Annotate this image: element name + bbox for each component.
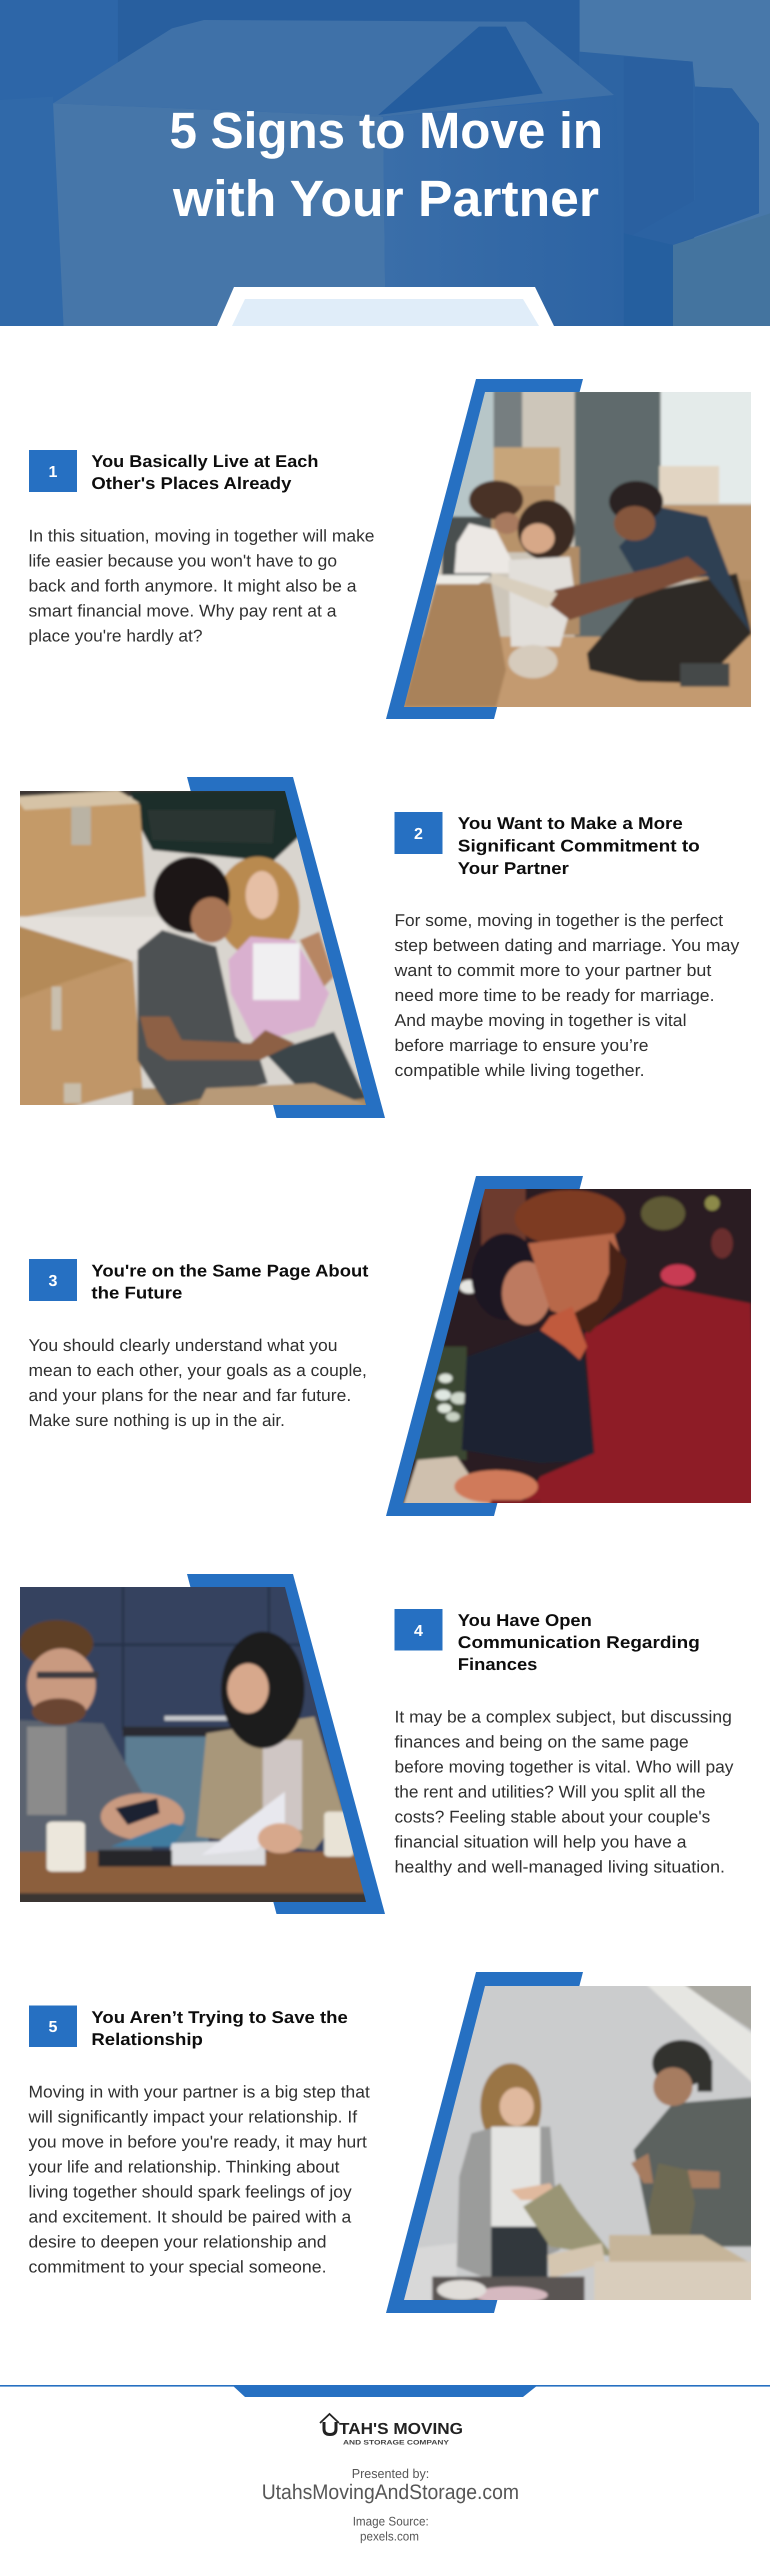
number badge 5: 5 — [49, 2019, 58, 2036]
body text 1: back and forth anymore. It might also be a — [28, 576, 357, 596]
photo 4: couple discussing finances — [10, 1574, 393, 1914]
heading 5: Relationship — [91, 2030, 203, 2049]
man — [138, 930, 268, 1107]
heading 2: Your Partner — [458, 859, 569, 878]
child — [469, 481, 523, 519]
body text 5 — [27, 2082, 370, 2276]
body text 1: In this situation, moving in together will make — [28, 526, 374, 546]
heading 3: the Future — [91, 1284, 182, 1302]
body text 5: desire to deepen your relationship and — [28, 2232, 326, 2251]
man — [587, 573, 752, 683]
website: UtahsMovingAndStorage.com — [262, 2481, 519, 2504]
footer divider with tab — [0, 2385, 770, 2397]
photo 1: family with boxes — [383, 379, 761, 719]
body text 4: costs? Feeling stable about your couple's — [394, 1808, 710, 1827]
foreground box — [404, 580, 506, 707]
number badge 3 — [29, 1259, 77, 1301]
laptop and hands — [403, 1457, 491, 1507]
body text 3: mean to each other, your goals as a couple, — [28, 1361, 367, 1380]
heading 1: You Basically Live at Each — [91, 452, 318, 471]
body text 1: smart financial move. Why pay rent at a — [28, 602, 337, 620]
body text 5: your life and relationship. Thinking about — [28, 2157, 340, 2176]
presented by: Presented by: — [352, 2466, 429, 2481]
man — [521, 1287, 759, 1507]
hero banner — [0, 0, 770, 333]
image source: Image Source: — [353, 2515, 429, 2529]
heading 5: You Aren’t Trying to Save the — [91, 2008, 348, 2027]
heading 2: You Want to Make a More — [458, 814, 683, 833]
body text 1 — [28, 526, 374, 646]
man — [15, 1720, 152, 1853]
heading 4: Communication Regarding — [458, 1633, 700, 1652]
body text 3: and your plans for the near and far future. — [28, 1386, 351, 1405]
man — [634, 2097, 756, 2247]
woman — [518, 500, 575, 560]
body text 5: commitment to your special someone. — [28, 2257, 326, 2276]
footer — [0, 2385, 770, 2543]
photo 2: couple on floor with boxes — [10, 777, 393, 1118]
body text 4: finances and being on the same page — [394, 1733, 689, 1752]
section 3 — [28, 1176, 761, 1516]
body text 5: Moving in with your partner is a big step that — [28, 2082, 370, 2101]
title — [170, 102, 603, 227]
section 4 — [10, 1574, 734, 1914]
body text 1: life easier because you won't have to go — [28, 552, 337, 570]
body text 4: the rent and utilities? Will you split all the — [394, 1783, 706, 1802]
body text 2: before marriage to ensure you’re — [394, 1036, 648, 1055]
number badge 1: 1 — [49, 464, 58, 481]
heading 3: You're on the Same Page About — [91, 1262, 369, 1280]
body text 2: want to commit more to your partner but — [393, 961, 712, 980]
body text 4 — [394, 1708, 734, 1877]
number badge 2 — [394, 812, 442, 854]
woman — [216, 857, 300, 957]
logo: Utah's Moving and Storage Company — [320, 2414, 463, 2447]
section 2 — [10, 777, 740, 1118]
section 5 — [27, 1972, 761, 2313]
body text 5: and excitement. It should be paired with a — [28, 2207, 352, 2226]
number badge 5 — [29, 2006, 77, 2047]
title: with Your Partner — [172, 170, 599, 227]
title: 5 Signs to Move in — [170, 102, 603, 159]
body text 4: healthy and well-managed living situation. — [394, 1858, 725, 1877]
number badge 2: 2 — [414, 826, 423, 843]
heading 2: Significant Commitment to — [458, 836, 700, 856]
woman — [470, 1232, 531, 1319]
heading 1: Other's Places Already — [91, 474, 292, 493]
woman — [196, 1717, 344, 1850]
woman — [479, 2062, 543, 2131]
photo 3: couple at laptop — [386, 1176, 761, 1516]
heading 2 — [458, 814, 700, 878]
body text 3: You should clearly understand what you — [28, 1336, 338, 1355]
number badge 4 — [394, 1609, 442, 1650]
body text 4: before moving together is vital. Who will pay — [394, 1758, 734, 1777]
body text 2: For some, moving in together is the perfect — [394, 911, 723, 930]
body text 5: you move in before you're ready, it may hurt — [28, 2132, 367, 2151]
body text 1: place you're hardly at? — [28, 626, 202, 646]
body text 5: living together should spark feelings of joy — [28, 2182, 352, 2201]
photo 5: couple unpacking clothes — [386, 1972, 761, 2313]
body text 3 — [28, 1336, 367, 1430]
body text 2: And maybe moving in together is vital — [394, 1011, 686, 1030]
section 1 — [28, 379, 761, 719]
logo: Utah's Moving and Storage Company: TAH'S MOVING — [339, 2421, 463, 2438]
body text 3: Make sure nothing is up in the air. — [28, 1411, 285, 1430]
number badge 3: 3 — [49, 1273, 58, 1290]
hero bottom tab — [217, 287, 554, 326]
table — [10, 1852, 383, 1893]
body text 5: will significantly impact your relationship. If — [27, 2107, 357, 2126]
body text 2 — [393, 911, 740, 1080]
body text 4: financial situation will help you have a — [394, 1833, 687, 1852]
body text 2: need more time to be ready for marriage. — [394, 986, 714, 1005]
image source: pexels.com — [360, 2529, 419, 2543]
heading 5 — [91, 2008, 348, 2049]
number badge 4: 4 — [414, 1623, 423, 1640]
heading 1 — [91, 452, 318, 493]
box and suitcase — [608, 2233, 747, 2263]
heading 4 — [458, 1611, 700, 1674]
heading 4: You Have Open — [458, 1611, 592, 1630]
heading 4: Finances — [458, 1655, 537, 1674]
body text 2: compatible while living together. — [394, 1061, 644, 1080]
body text 4: It may be a complex subject, but discussing — [394, 1708, 732, 1727]
image source — [353, 2515, 429, 2543]
number badge 1 — [29, 450, 77, 492]
heading 3 — [91, 1262, 369, 1302]
logo: Utah's Moving and Storage Company: AND STORAGE COMPANY — [343, 2440, 450, 2447]
body text 2: step between dating and marriage. You may — [394, 936, 740, 955]
